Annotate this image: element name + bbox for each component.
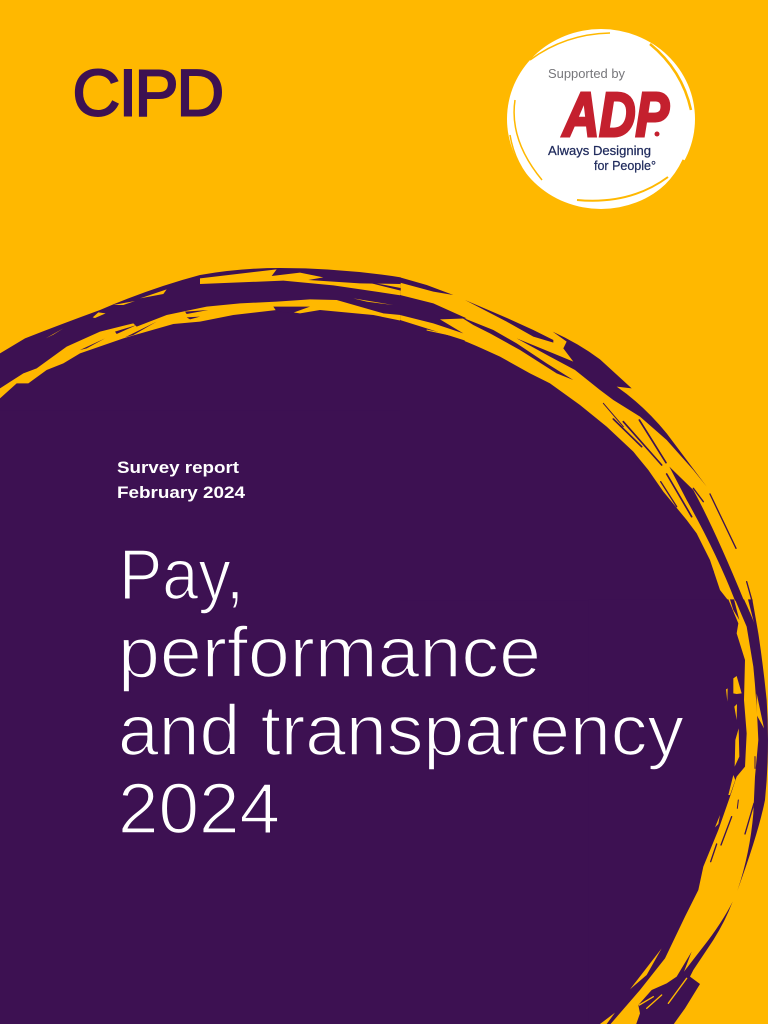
brush arc: upper left	[0, 268, 401, 411]
report label: Survey report	[117, 458, 239, 477]
tagline	[548, 143, 656, 173]
brush arc: upper right	[400, 277, 752, 601]
disc interior	[0, 330, 725, 1024]
title	[118, 536, 685, 849]
brush arc: right and bottom	[588, 599, 768, 1024]
badge: white brush circle	[507, 29, 695, 209]
title: performance	[118, 614, 541, 693]
title: 2024	[118, 770, 280, 849]
CIPD logo: CIPD	[72, 56, 224, 130]
tagline: for People°	[594, 158, 656, 173]
brush circle: purple disc with yellow strokes	[0, 268, 768, 1024]
ADP logo: ADP	[561, 81, 670, 150]
tagline: Always Designing	[548, 143, 651, 158]
title: Pay,	[119, 536, 244, 615]
report label: February 2024	[117, 483, 246, 502]
sponsor badge	[507, 29, 695, 209]
report label	[117, 458, 246, 502]
title: and transparency	[118, 692, 685, 771]
supported by: Supported by	[548, 67, 626, 81]
